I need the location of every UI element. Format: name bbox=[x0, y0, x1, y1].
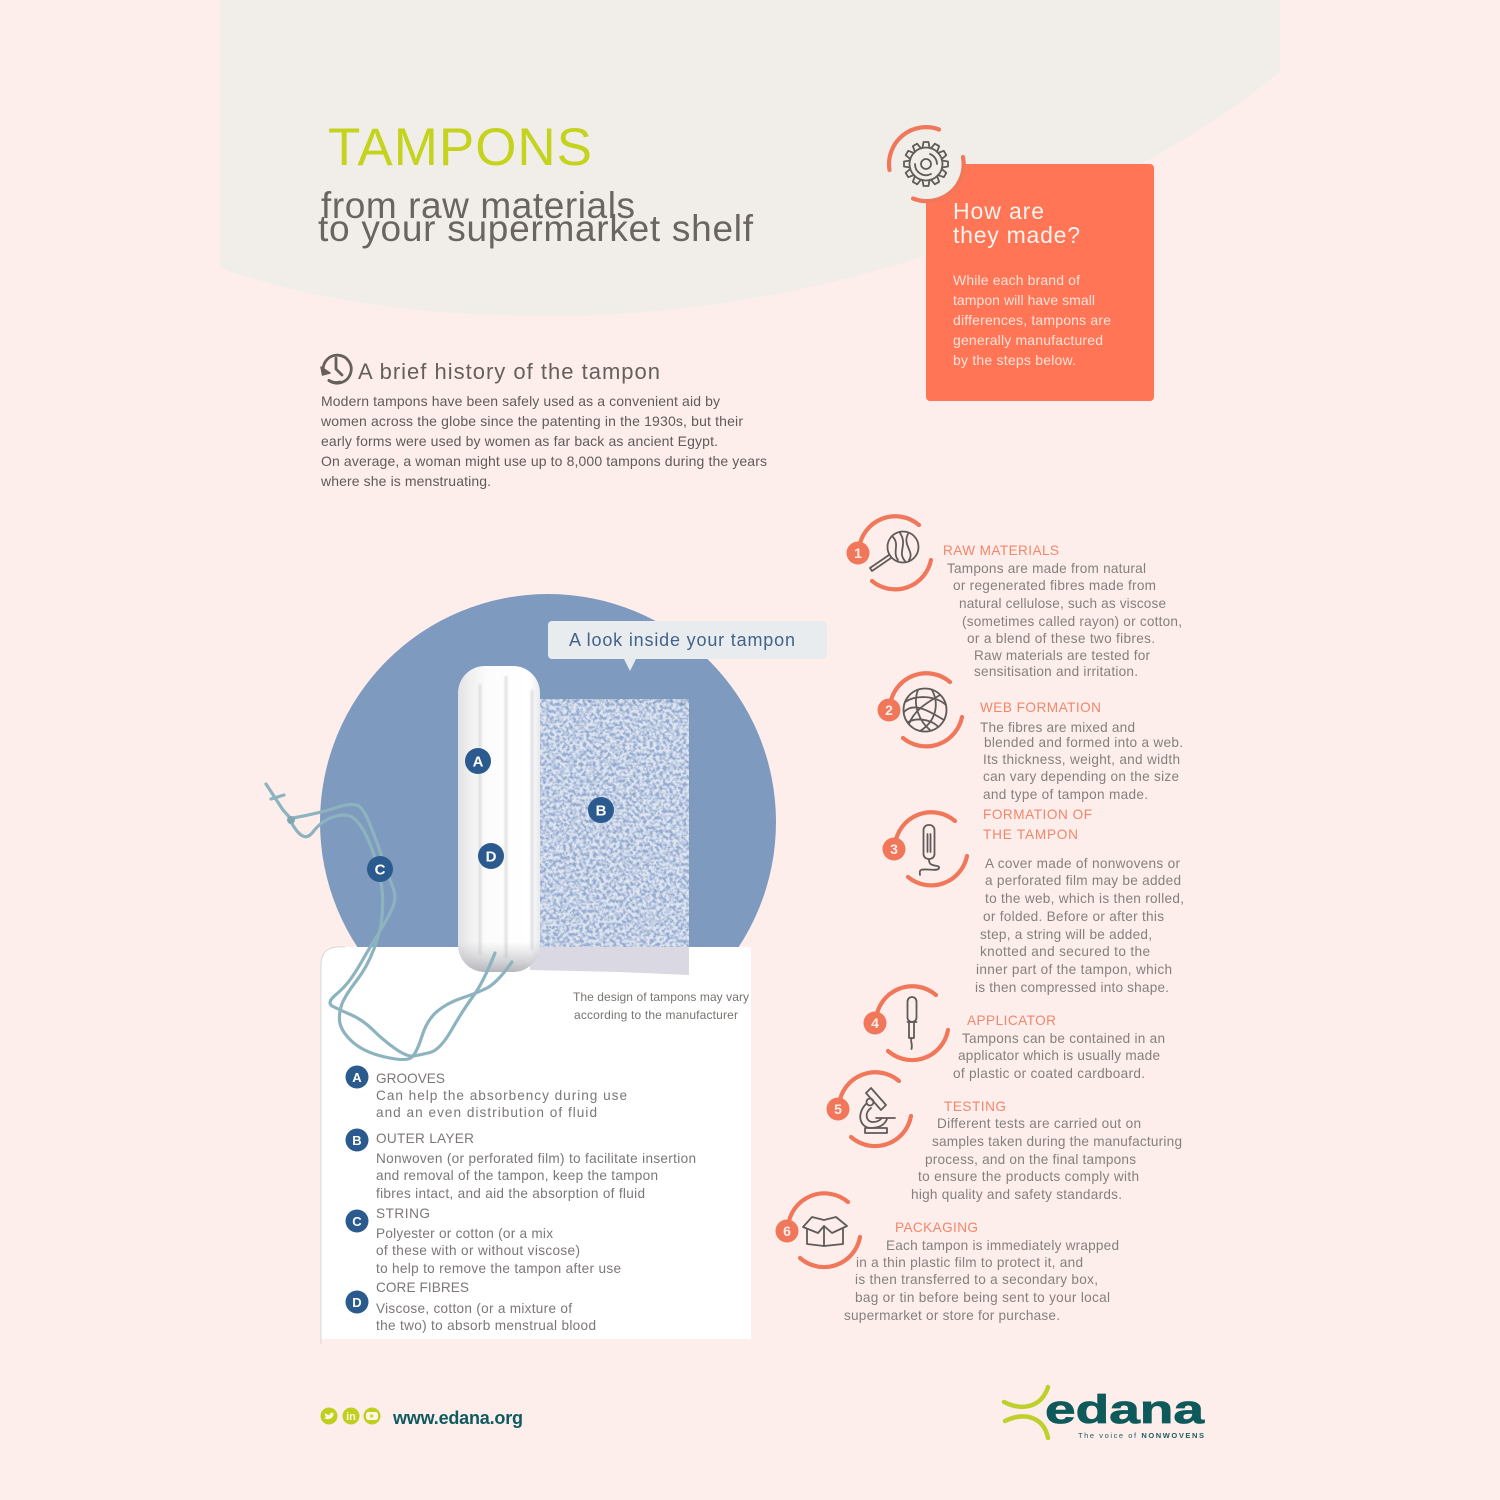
legend C string: Polyester or cotton (or a mix bbox=[376, 1226, 553, 1241]
panel heading bbox=[953, 198, 1080, 248]
edana logo bbox=[1004, 1387, 1205, 1440]
legend C string: of these with or without viscose) bbox=[376, 1243, 580, 1258]
step 1 raw materials: Raw materials are tested for bbox=[974, 648, 1150, 663]
panel text: While each brand of bbox=[953, 272, 1080, 288]
step 3 formation of the tampon: a perforated film may be added bbox=[985, 873, 1181, 888]
step 1 icon: 1 bbox=[854, 545, 862, 561]
step 3 formation of the tampon: or folded. Before or after this bbox=[983, 909, 1164, 924]
legend B outer layer bbox=[346, 1128, 696, 1201]
step 4 icon: 4 bbox=[871, 1015, 879, 1031]
marker B bbox=[588, 797, 614, 823]
design note: according to the manufacturer bbox=[574, 1008, 738, 1022]
marker B: B bbox=[596, 802, 607, 820]
legend B outer layer: OUTER LAYER bbox=[376, 1131, 474, 1146]
tampon bbox=[458, 666, 540, 972]
step 4 applicator: of plastic or coated cardboard. bbox=[953, 1066, 1145, 1081]
step 4 applicator bbox=[864, 986, 1165, 1081]
string bbox=[266, 784, 512, 1060]
legend C string: to help to remove the tampon after use bbox=[376, 1261, 621, 1276]
step 1 icon bbox=[846, 516, 931, 589]
edana logo: The voice of NONWOVENS bbox=[1078, 1431, 1204, 1440]
history text: where she is menstruating. bbox=[320, 473, 491, 489]
header curved band bbox=[220, 0, 1280, 316]
legend A grooves: GROOVES bbox=[376, 1071, 445, 1086]
history text: On average, a woman might use up to 8,000 tampons during the years bbox=[321, 453, 767, 469]
step 5 testing: samples taken during the manufacturing bbox=[932, 1134, 1182, 1149]
step 5 testing: Different tests are carried out on bbox=[937, 1116, 1141, 1131]
step 2 icon bbox=[878, 673, 962, 746]
marker A bbox=[465, 748, 491, 774]
panel text: by the steps below. bbox=[953, 352, 1076, 368]
legend B outer layer: Nonwoven (or perforated film) to facilitate insertion bbox=[376, 1151, 696, 1166]
design note bbox=[573, 990, 749, 1022]
marker D bbox=[478, 843, 504, 869]
step 1 raw materials: natural cellulose, such as viscose bbox=[959, 596, 1166, 611]
step 2 web formation: Its thickness, weight, and width bbox=[983, 752, 1180, 767]
step 3 formation of the tampon: is then compressed into shape. bbox=[975, 980, 1169, 995]
website url: www.edana.org bbox=[392, 1408, 523, 1428]
step 1 raw materials: or regenerated fibres made from bbox=[953, 578, 1156, 593]
step 5 icon bbox=[826, 1072, 911, 1146]
outer layer fabric sheet bbox=[530, 699, 689, 975]
step 3 formation of the tampon: to the web, which is then rolled, bbox=[985, 891, 1184, 906]
legend B outer layer: B bbox=[352, 1133, 362, 1148]
edana logo: edana bbox=[1045, 1388, 1205, 1432]
step 3 formation of the tampon: A cover made of nonwovens or bbox=[985, 856, 1180, 871]
white legend panel bbox=[321, 947, 751, 1344]
step 3 icon bbox=[882, 812, 967, 885]
legend D core fibres: the two) to absorb menstrual blood bbox=[376, 1318, 596, 1333]
step 4 icon bbox=[864, 986, 948, 1060]
history text: early forms were used by women as far back as ancient Egypt. bbox=[321, 433, 718, 449]
panel: how are they made bbox=[889, 127, 1154, 401]
icon: youtube bbox=[364, 1408, 380, 1424]
callout: a look inside your tampon: A look inside your tampon bbox=[569, 630, 795, 650]
social icons bbox=[320, 1408, 380, 1424]
step 1 raw materials: Tampons are made from natural bbox=[947, 561, 1146, 576]
legend A grooves: A bbox=[352, 1070, 362, 1085]
legend D core fibres: CORE FIBRES bbox=[376, 1280, 469, 1295]
panel heading: How are bbox=[953, 198, 1044, 224]
icon: linkedin: in bbox=[346, 1411, 356, 1423]
marker A: A bbox=[473, 754, 484, 770]
step 6 packaging: in a thin plastic film to protect it, and bbox=[856, 1255, 1083, 1270]
panel text: generally manufactured bbox=[953, 332, 1103, 348]
icon: history clock bbox=[321, 355, 351, 383]
legend C string bbox=[346, 1206, 621, 1276]
step 3 icon: 3 bbox=[890, 841, 898, 857]
step 5 testing: to ensure the products comply with bbox=[918, 1169, 1139, 1184]
legend A grooves: Can help the absorbency during use bbox=[376, 1088, 627, 1103]
legend C string: STRING bbox=[376, 1206, 430, 1221]
legend D core fibres: D bbox=[352, 1295, 362, 1310]
design note: The design of tampons may vary bbox=[573, 990, 749, 1004]
history text bbox=[320, 393, 767, 489]
step 1 raw materials: RAW MATERIALS bbox=[943, 543, 1059, 558]
step 3 formation of the tampon: knotted and secured to the bbox=[980, 944, 1150, 959]
subtitle bbox=[318, 185, 754, 249]
legend A grooves bbox=[346, 1066, 627, 1120]
legend bbox=[346, 1066, 696, 1333]
step 6 packaging: PACKAGING bbox=[895, 1220, 978, 1235]
step 2 web formation: WEB FORMATION bbox=[980, 700, 1101, 715]
title: TAMPONS bbox=[328, 118, 592, 177]
subtitle: to your supermarket shelf bbox=[318, 208, 754, 249]
panel text: tampon will have small bbox=[953, 292, 1095, 308]
step 1 raw materials bbox=[846, 516, 1182, 679]
step 1 raw materials: (sometimes called rayon) or cotton, bbox=[962, 614, 1182, 629]
step 2 web formation bbox=[878, 673, 1183, 802]
history text: Modern tampons have been safely used as a convenient aid by bbox=[321, 393, 720, 409]
step 4 applicator: APPLICATOR bbox=[967, 1013, 1056, 1028]
marker C bbox=[367, 856, 393, 882]
step 1 raw materials: sensitisation and irritation. bbox=[974, 664, 1138, 679]
step 2 web formation: The fibres are mixed and bbox=[980, 720, 1135, 735]
step 3 formation of the tampon bbox=[882, 807, 1184, 995]
gear icon with ring bbox=[889, 127, 964, 201]
step 6 packaging: supermarket or store for purchase. bbox=[844, 1308, 1060, 1323]
step 5 icon: 5 bbox=[834, 1101, 842, 1117]
panel text bbox=[953, 272, 1111, 368]
step 4 applicator: Tampons can be contained in an bbox=[962, 1031, 1165, 1046]
legend C string: C bbox=[352, 1214, 362, 1229]
legend D core fibres bbox=[346, 1280, 596, 1333]
step 5 testing: high quality and safety standards. bbox=[911, 1187, 1122, 1202]
step 5 testing: TESTING bbox=[944, 1099, 1006, 1114]
step 3 formation of the tampon: step, a string will be added, bbox=[980, 927, 1152, 942]
subtitle: from raw materials bbox=[321, 185, 635, 226]
history heading: A brief history of the tampon bbox=[358, 359, 660, 384]
step 1 raw materials: or a blend of these two fibres. bbox=[967, 631, 1155, 646]
callout: a look inside your tampon bbox=[548, 621, 827, 671]
marker C: C bbox=[375, 862, 386, 878]
step 4 applicator: applicator which is usually made bbox=[958, 1048, 1160, 1063]
step 5 testing bbox=[826, 1072, 1182, 1202]
step 6 packaging: Each tampon is immediately wrapped bbox=[886, 1238, 1119, 1253]
step 5 testing: process, and on the final tampons bbox=[925, 1152, 1136, 1167]
legend B outer layer: and removal of the tampon, keep the tampon bbox=[376, 1168, 658, 1183]
legend D core fibres: Viscose, cotton (or a mixture of bbox=[376, 1301, 572, 1316]
step 2 web formation: and type of tampon made. bbox=[983, 787, 1148, 802]
legend A grooves: and an even distribution of fluid bbox=[376, 1105, 597, 1120]
step 6 packaging: is then transferred to a secondary box, bbox=[855, 1272, 1098, 1287]
step 6 icon: 6 bbox=[783, 1223, 791, 1239]
history text: women across the globe since the patenting in the 1930s, but their bbox=[320, 413, 743, 429]
step 3 formation of the tampon: inner part of the tampon, which bbox=[976, 962, 1172, 977]
legend B outer layer: fibres intact, and aid the absorption of fluid bbox=[376, 1186, 645, 1201]
marker D: D bbox=[486, 848, 497, 866]
step 2 web formation: blended and formed into a web. bbox=[984, 735, 1183, 750]
blue circle backdrop bbox=[320, 594, 776, 1050]
icon: twitter bbox=[320, 1408, 338, 1424]
step 6 icon bbox=[776, 1193, 860, 1267]
step 3 formation of the tampon: THE TAMPON bbox=[983, 827, 1078, 842]
step 6 packaging bbox=[776, 1193, 1119, 1323]
step 2 icon: 2 bbox=[885, 702, 893, 718]
step 2 web formation: can vary depending on the size bbox=[983, 769, 1179, 784]
panel heading: they made? bbox=[953, 222, 1080, 248]
step 3 formation of the tampon: FORMATION OF bbox=[983, 807, 1092, 822]
panel text: differences, tampons are bbox=[953, 312, 1111, 328]
step 6 packaging: bag or tin before being sent to your local bbox=[855, 1290, 1110, 1305]
